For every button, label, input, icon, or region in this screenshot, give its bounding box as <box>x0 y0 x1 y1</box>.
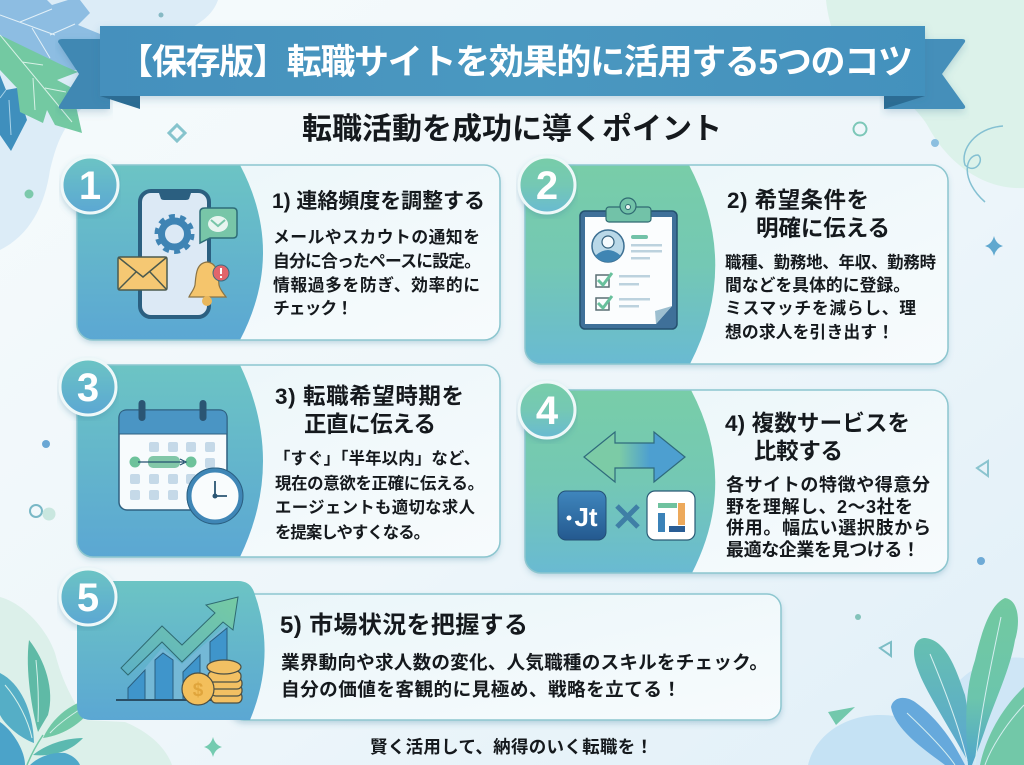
text: tip 2 body: 間などを具体的に登録。 <box>725 276 910 295</box>
text: tip 4 body: 各サイトの特徴や得意分 <box>726 474 930 495</box>
banner left tail <box>58 39 110 109</box>
text: tip 5 body: 業界動向や求人数の変化、人気職種のスキルをチェック。 <box>281 652 768 673</box>
text: tip 3 body: エージェントも適切な求人 <box>275 498 476 517</box>
footer message: 賢く活用して、納得のいく転職を！ <box>370 737 653 757</box>
text: tip 2 heading: 2) 希望条件を <box>727 188 869 213</box>
badge: number 4: 4 <box>536 389 559 433</box>
badge: number 2: 2 <box>536 164 558 208</box>
icon: growth chart with coins <box>116 597 242 705</box>
text: tip 5 heading: 5) 市場状況を把握する <box>280 612 528 639</box>
panel: tip 4 <box>519 382 948 573</box>
subtitle: 転職活動を成功に導くポイント <box>302 113 722 146</box>
icon: service logo A <box>558 491 606 540</box>
text: tip 3 body: 「すぐ」「半年以内」など、 <box>274 449 480 468</box>
icon: smartphone with notifications <box>118 190 237 317</box>
text: tip 4 heading: 4) 複数サービスを <box>725 411 910 436</box>
text: tip 3 body: を提案しやすくなる。 <box>275 524 430 542</box>
icon: calendar and clock <box>119 400 243 524</box>
decoration: top-left leaves <box>0 0 105 151</box>
text: tip 3 body: 現在の意欲を正確に伝える。 <box>275 474 484 493</box>
badge: number 2 <box>519 157 575 213</box>
text: tip 2 heading <box>727 188 890 241</box>
text: tip 4 heading <box>725 411 910 464</box>
text: tip 1 heading: 1) 連絡頻度を調整する <box>272 190 485 213</box>
text: tip 2 body: ミスマッチを減らし、理 <box>725 299 916 318</box>
badge: number 3 <box>60 359 116 415</box>
badge: number 5 <box>60 569 116 625</box>
icon: service logo B <box>647 491 695 540</box>
icon: growth chart with coins: $ <box>193 680 204 701</box>
decoration: bottom-right leaves <box>891 598 1024 765</box>
text: tip 2 heading: 明確に伝える <box>756 216 890 241</box>
badge: number 3: 3 <box>77 366 99 410</box>
text: tip 3 heading <box>275 384 464 437</box>
text: tip 4 body: 最適な企業を見つける！ <box>726 540 920 560</box>
panel: tip 2 <box>519 157 948 364</box>
banner right tail <box>884 39 965 109</box>
text: tip 4 body: 野を理解し、2～3社を <box>726 497 913 517</box>
text: tip 1 body: 自分に合ったペースに設定。 <box>273 251 481 271</box>
icon: double arrow <box>584 432 685 482</box>
badge: number 4 <box>519 382 575 438</box>
text: tip 1 body: メールやスカウトの通知を <box>273 228 480 247</box>
text: tip 4 body: 併用。幅広い選択肢から <box>726 518 931 538</box>
banner ribbon <box>100 26 925 96</box>
text: tip 2 body: 職種、勤務地、年収、勤務時 <box>725 253 936 272</box>
text: tip 1 body: 情報過多を防ぎ、効率的に <box>273 275 480 295</box>
banner folds <box>100 96 140 109</box>
panel: tip 3 <box>60 359 500 557</box>
panel: tip 1 <box>62 157 500 340</box>
title banner <box>58 26 965 109</box>
icon: clipboard profile <box>580 198 677 329</box>
text: tip 5 body: 自分の価値を客観的に見極め、戦略を立てる！ <box>281 679 681 700</box>
text: tip 1 body <box>273 228 481 318</box>
panel: tip 5 <box>60 569 781 720</box>
text: tip 4 heading: 比較する <box>754 439 843 464</box>
banner title text: 【保存版】転職サイトを効果的に活用する5つのコツ <box>118 43 913 82</box>
text: tip 1 body: チェック！ <box>273 299 353 318</box>
text: tip 5 body <box>281 652 768 700</box>
badge: number 1: 1 <box>79 164 101 208</box>
badge: number 1 <box>62 157 118 213</box>
decoration: bottom-left leaves <box>0 640 100 765</box>
icon: multiply sign <box>617 506 638 527</box>
text: tip 3 heading: 3) 転職希望時期を <box>275 384 464 409</box>
text: tip 2 body <box>725 253 936 342</box>
text: tip 4 body <box>726 474 931 560</box>
text: tip 3 body <box>274 449 484 542</box>
badge: number 5: 5 <box>77 576 99 620</box>
icon: service logo A: Jt <box>574 502 598 532</box>
text: tip 2 body: 想の求人を引き出す！ <box>725 322 894 342</box>
text: tip 3 heading: 正直に伝える <box>304 412 436 437</box>
